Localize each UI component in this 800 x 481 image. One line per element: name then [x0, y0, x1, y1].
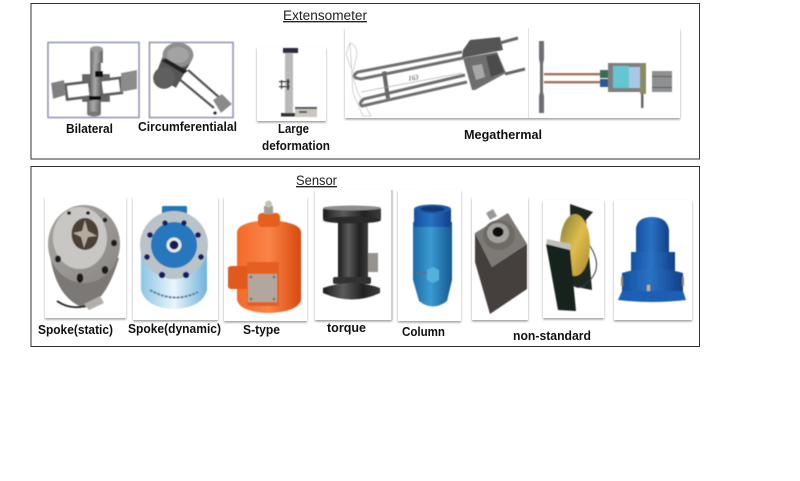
label: Large deformation: Large [278, 122, 309, 136]
card: spoke dynamic sensor [133, 197, 218, 320]
card: megathermal extensometer [345, 28, 680, 118]
card: S-type sensor [224, 197, 307, 321]
drawing: angled rods assembly [346, 37, 525, 116]
heading: Sensor: Sensor [296, 173, 337, 188]
card: torque sensor [315, 190, 393, 320]
card: large deformation extensometer [257, 47, 326, 121]
label: Circumferentialal: Circumferentialal [138, 120, 237, 134]
card: spoke static sensor [45, 197, 126, 318]
panel: sensor [31, 166, 700, 346]
label: Large deformation [262, 122, 330, 153]
label: Large deformation: deformation [262, 139, 330, 153]
label: Spoke(dynamic): Spoke(dynamic) [128, 322, 221, 336]
label: Spoke(static): Spoke(static) [38, 323, 113, 337]
drawing: specimen and heated head [539, 41, 672, 113]
drawing: angled rods assembly: 163 [408, 73, 419, 82]
label: Bilateral: Bilateral [66, 122, 113, 136]
card: non-standard sensor, square [472, 197, 528, 320]
label: torque: torque [327, 321, 366, 335]
label: Column: Column [402, 325, 445, 339]
heading: Extensometer: Extensometer [283, 8, 367, 23]
card: non-standard sensor, disc [543, 200, 604, 318]
card: non-standard sensor, blue dome [614, 200, 692, 320]
card: circumferential extensometer [150, 42, 233, 118]
label: non-standard: non-standard [513, 329, 591, 343]
label: S-type: S-type [243, 323, 280, 337]
label: Megathermal: Megathermal [464, 128, 542, 142]
card: column sensor [398, 190, 461, 321]
card: bilateral extensometer [48, 42, 139, 118]
panel: extensometer [31, 4, 700, 159]
